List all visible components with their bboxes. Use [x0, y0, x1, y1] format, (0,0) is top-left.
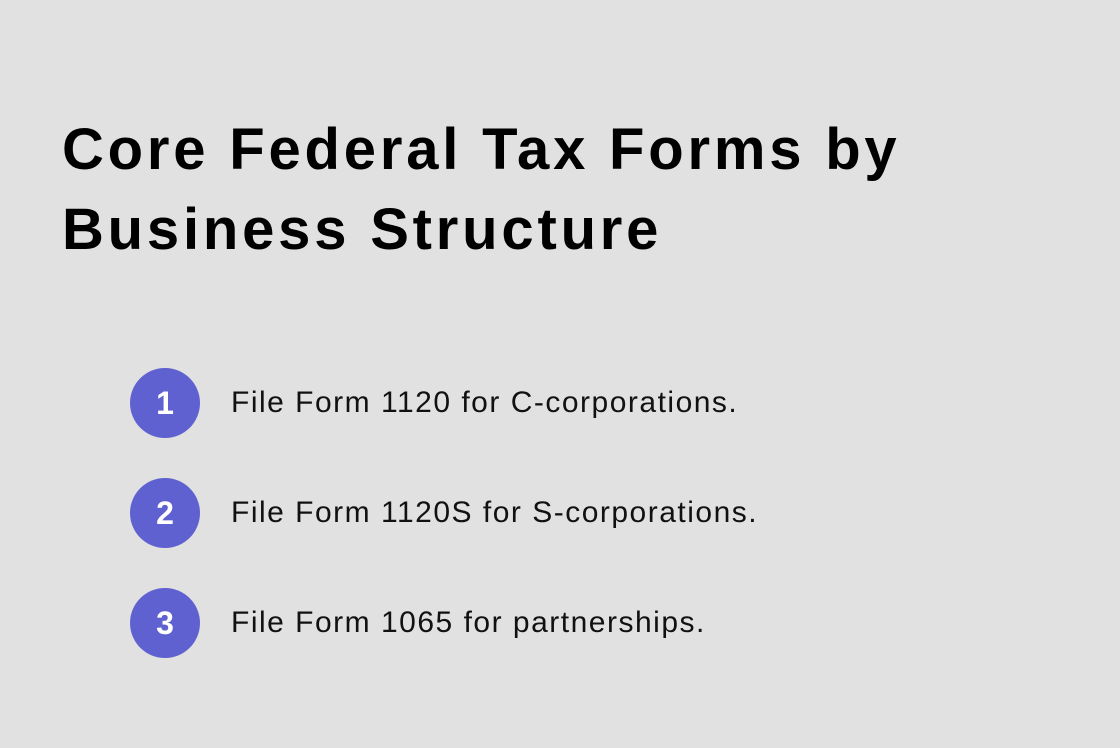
text 1: File Form 1120 for C-corporations.	[231, 386, 738, 419]
badge 3: 3	[156, 605, 174, 641]
badge 2	[130, 478, 200, 548]
badge 3	[130, 588, 200, 658]
text 3: File Form 1065 for partnerships.	[231, 606, 706, 639]
title: Business Structure	[62, 197, 662, 262]
title: Core Federal Tax Forms by	[62, 117, 900, 182]
item 3	[130, 588, 706, 658]
text 2: File Form 1120S for S-corporations.	[231, 496, 758, 529]
title	[62, 117, 900, 262]
item 2	[130, 478, 758, 548]
badge 1	[130, 368, 200, 438]
badge 1: 1	[156, 385, 174, 421]
item 1	[130, 368, 738, 438]
badge 2: 2	[156, 495, 174, 531]
